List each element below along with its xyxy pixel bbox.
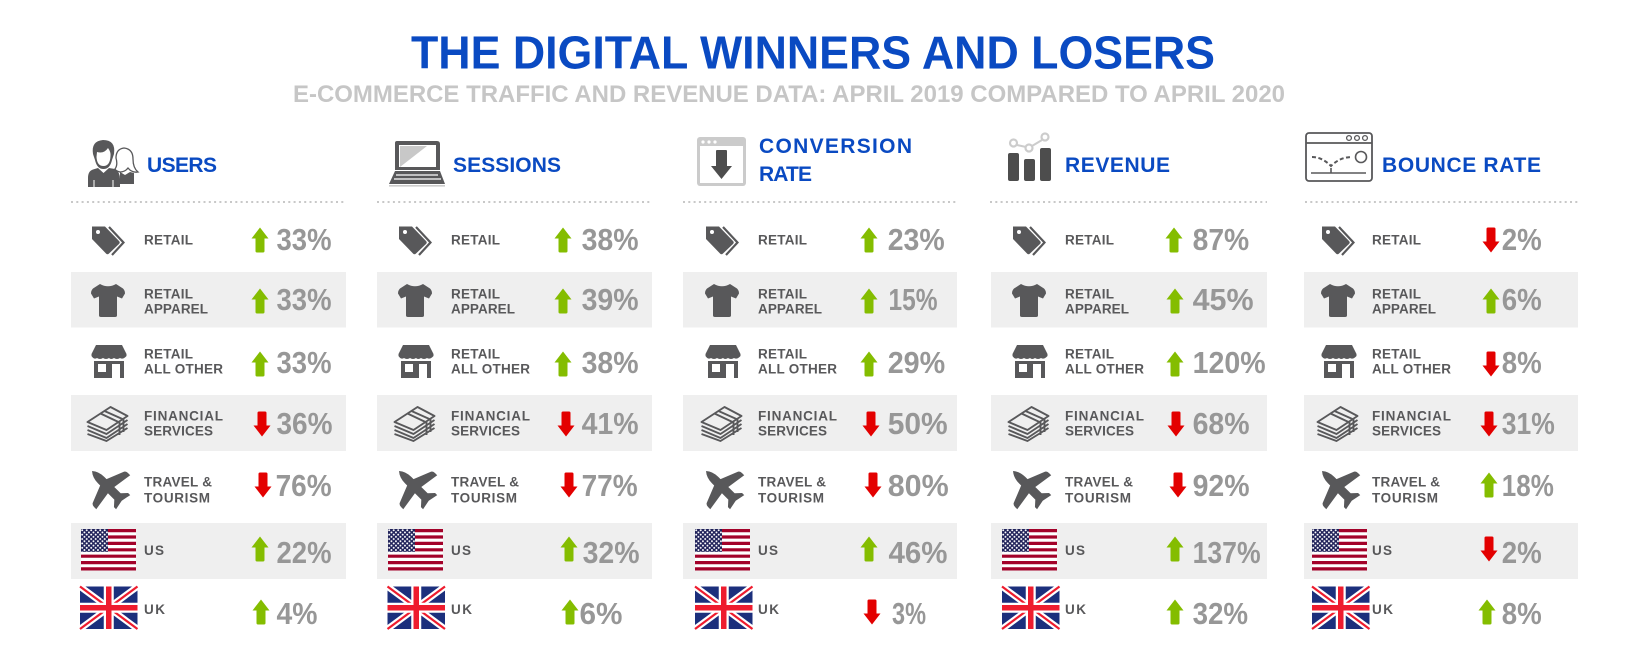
row: retail (1013, 223, 1249, 257)
row: retail all other: ALL OTHER (758, 362, 837, 376)
row: financial services: SERVICES (1372, 424, 1441, 438)
icon: bounce window (1306, 133, 1372, 181)
subtitle: E-COMMERCE TRAFFIC AND REVENUE DATA: APRIL 2019 COMPARED TO APRIL 2020 (293, 81, 1285, 108)
row: travel and tourism: TRAVEL & (451, 474, 519, 490)
row: retail apparel (91, 283, 332, 317)
row: retail apparel: 33% (276, 283, 332, 317)
row: retail all other: RETAIL (1065, 346, 1114, 362)
row: uk: 32% (1193, 597, 1248, 631)
row: travel and tourism (382, 454, 638, 519)
row: retail all other: RETAIL (758, 346, 807, 362)
row: travel and tourism (996, 454, 1250, 519)
row: us (81, 529, 332, 570)
panel: users (71, 140, 346, 631)
row: travel and tourism: 92% (1193, 469, 1250, 503)
row: retail all other (706, 345, 945, 380)
row: financial services: 68% (1193, 407, 1250, 441)
row: retail apparel: 45% (1193, 283, 1254, 317)
row: uk: 8% (1502, 597, 1542, 631)
row: us (695, 529, 948, 570)
row: retail (706, 223, 945, 257)
panel: conversion rate (683, 135, 957, 631)
icon: bar chart (1008, 134, 1051, 181)
row: us: 32% (583, 536, 640, 570)
row: retail apparel: APPAREL (144, 302, 208, 316)
row: financial services (88, 407, 332, 441)
row: financial services: FINANCIAL (758, 408, 837, 424)
row: retail all other: 29% (888, 346, 945, 380)
row: retail (1322, 223, 1542, 257)
row: retail all other: 120% (1193, 346, 1266, 380)
row: retail apparel: APPAREL (451, 302, 515, 316)
panel: sessions (377, 141, 652, 631)
row: retail: 2% (1502, 223, 1542, 257)
row: uk: UK (144, 602, 165, 617)
row: retail all other: ALL OTHER (1372, 362, 1451, 376)
row: financial services: FINANCIAL (144, 408, 223, 424)
row: travel and tourism (689, 454, 949, 519)
row: retail all other: ALL OTHER (144, 362, 223, 376)
row: travel and tourism: 18% (1502, 469, 1554, 503)
row: travel and tourism: TOURISM (1065, 490, 1131, 506)
row: retail all other: ALL OTHER (1065, 362, 1144, 376)
row: retail: RETAIL (451, 232, 500, 248)
row: financial services: 36% (276, 407, 332, 441)
row: us: US (451, 543, 471, 558)
row: financial services: SERVICES (758, 424, 827, 438)
row: travel and tourism: TOURISM (1372, 490, 1438, 506)
row: travel and tourism: TOURISM (144, 490, 210, 506)
row: retail all other (1012, 345, 1266, 380)
row: travel and tourism: TRAVEL & (758, 474, 826, 490)
row: retail apparel: 39% (582, 283, 639, 317)
row: retail apparel (705, 283, 938, 317)
row: us: 46% (888, 536, 948, 570)
row: retail apparel: APPAREL (1065, 302, 1129, 316)
row: retail: 23% (888, 223, 945, 257)
row: retail apparel: APPAREL (758, 302, 822, 316)
row: retail all other: RETAIL (144, 346, 193, 362)
heading: bounce rate: BOUNCE RATE (1382, 154, 1541, 177)
row: uk: UK (451, 602, 472, 617)
row: travel and tourism: TRAVEL & (1065, 474, 1133, 490)
row: retail apparel (1012, 283, 1254, 317)
row: financial services: 41% (582, 407, 639, 441)
row: travel and tourism: TOURISM (758, 490, 824, 506)
row: uk (695, 586, 926, 631)
row: financial services (1318, 407, 1555, 441)
row: travel and tourism: TRAVEL & (144, 474, 212, 490)
heading: conversion rate: RATE (759, 163, 812, 186)
row: retail all other: ALL OTHER (451, 362, 530, 376)
row: financial services: SERVICES (144, 424, 213, 438)
row: financial services (394, 407, 639, 441)
row: us: US (144, 543, 164, 558)
row: financial services: SERVICES (1065, 424, 1134, 438)
row: retail apparel: RETAIL (1372, 286, 1421, 302)
row: retail all other: RETAIL (1372, 346, 1421, 362)
row: retail apparel (1321, 283, 1542, 317)
row: retail all other (1322, 345, 1542, 380)
row: retail: RETAIL (1372, 232, 1421, 248)
row: retail apparel: RETAIL (1065, 286, 1114, 302)
row: travel and tourism: TOURISM (451, 490, 517, 506)
panel: bounce rate (1304, 133, 1578, 631)
row: uk: UK (1372, 602, 1393, 617)
row: uk (1312, 586, 1542, 631)
row: us: US (1372, 543, 1392, 558)
row: retail all other: RETAIL (451, 346, 500, 362)
row: retail: RETAIL (144, 232, 193, 248)
row: financial services: 50% (888, 407, 948, 441)
title: THE DIGITAL WINNERS AND LOSERS (411, 26, 1215, 78)
row: financial services: FINANCIAL (1065, 408, 1144, 424)
heading: sessions: SESSIONS (453, 154, 561, 177)
row: retail apparel: 15% (888, 283, 938, 317)
row: us (1002, 529, 1261, 570)
heading: conversion rate (759, 135, 912, 186)
row: uk: 6% (580, 597, 622, 631)
row: us: 137% (1193, 536, 1261, 570)
row: retail: 87% (1193, 223, 1249, 257)
row: retail all other (92, 345, 332, 380)
row: retail: RETAIL (758, 232, 807, 248)
row: travel and tourism: TRAVEL & (1372, 474, 1440, 490)
row: financial services: FINANCIAL (451, 408, 530, 424)
heading: users: USERS (147, 154, 217, 177)
row: uk (1002, 586, 1248, 631)
icon: download window (697, 137, 746, 186)
row: us: 22% (276, 536, 332, 570)
row: retail all other: 38% (582, 346, 639, 380)
row: retail all other: 8% (1502, 346, 1542, 380)
row: financial services (702, 407, 948, 441)
row: retail apparel: APPAREL (1372, 302, 1436, 316)
row: travel and tourism: 80% (888, 469, 949, 503)
row: uk: 4% (276, 597, 318, 631)
row: travel and tourism: 77% (582, 469, 638, 503)
heading: conversion rate: CONVERSION (759, 135, 912, 158)
row: financial services (1008, 407, 1250, 441)
row: travel and tourism: 76% (276, 469, 332, 503)
row: uk: UK (758, 602, 779, 617)
row: us: US (1065, 543, 1085, 558)
row: retail apparel: RETAIL (144, 286, 193, 302)
row: retail apparel: RETAIL (758, 286, 807, 302)
row: uk (80, 586, 318, 631)
row: us: 2% (1502, 536, 1542, 570)
row: retail: 38% (582, 223, 639, 257)
row: retail apparel (398, 283, 639, 317)
row: uk: UK (1065, 602, 1086, 617)
row: travel and tourism (75, 454, 332, 519)
icon: users (88, 140, 138, 187)
row: financial services: FINANCIAL (1372, 408, 1451, 424)
row: retail apparel: RETAIL (451, 286, 500, 302)
row: travel and tourism (1305, 454, 1554, 519)
row: retail (399, 223, 639, 257)
row: retail: 33% (276, 223, 332, 257)
row: retail: RETAIL (1065, 232, 1114, 248)
row: financial services: SERVICES (451, 424, 520, 438)
row: uk: 3% (892, 597, 926, 631)
row: retail all other: 33% (276, 346, 332, 380)
row: retail all other (398, 345, 639, 380)
row: retail apparel: 6% (1502, 283, 1542, 317)
icon: laptop (389, 141, 445, 187)
panel: revenue (990, 134, 1267, 631)
row: financial services: 31% (1502, 407, 1555, 441)
row: us (1312, 529, 1542, 570)
row: us (388, 529, 640, 570)
row: retail (92, 223, 332, 257)
row: uk (388, 586, 622, 631)
row: us: US (758, 543, 778, 558)
heading: revenue: REVENUE (1065, 154, 1170, 177)
